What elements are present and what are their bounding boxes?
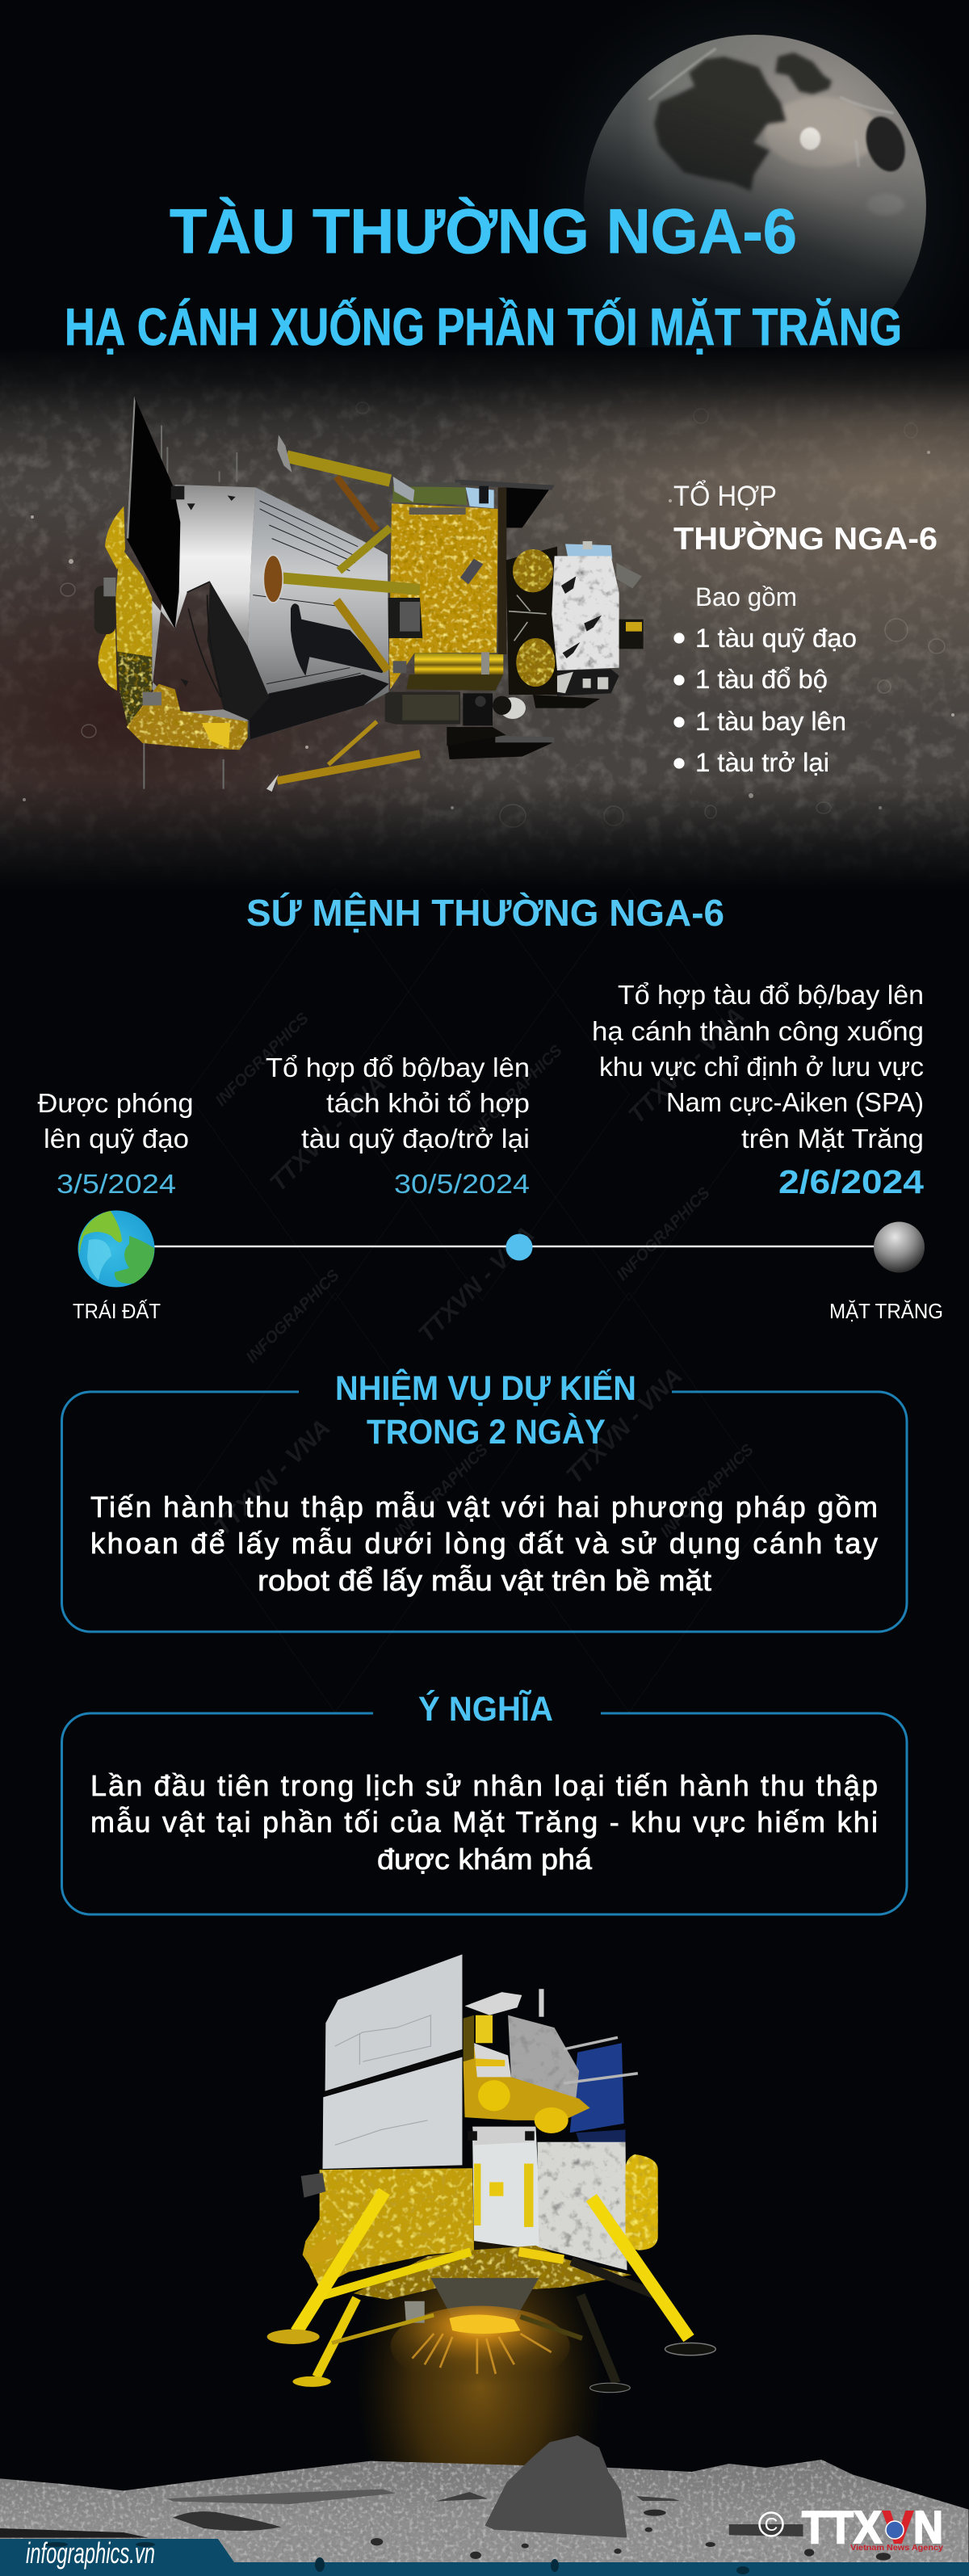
heading: mission: SỨ MỆNH THƯỜNG NGA-6 — [246, 892, 724, 934]
text: planned tasks: khoan để lấy mẫu dưới lòng đất và sử dụng cánh tay — [90, 1527, 878, 1560]
moon — [577, 27, 933, 347]
watermarks — [188, 889, 776, 1712]
heading: significance: Ý NGHĨA — [418, 1690, 553, 1729]
rock — [485, 2435, 627, 2538]
timeline step 2: tách khỏi tổ hợp — [326, 1088, 530, 1118]
timeline step 2: 30/5/2024 — [394, 1169, 530, 1199]
spacecraft orbiter body (left part) — [94, 396, 420, 792]
list of components: 1 tàu đổ bộ — [695, 665, 828, 694]
timeline step 3 — [592, 980, 924, 1200]
timeline step 3: Tổ hợp tàu đổ bộ/bay lên — [618, 980, 924, 1010]
list of components: 1 tàu quỹ đạo — [695, 624, 857, 653]
title — [65, 195, 902, 356]
timeline step 3: trên Mặt Trăng — [741, 1124, 924, 1154]
watermarks: INFOGRAPHICS — [243, 1266, 343, 1367]
watermarks: TTXVN - VNA — [623, 1002, 750, 1129]
milestone dot — [505, 1234, 533, 1260]
timeline step 2: Tổ hợp đổ bộ/bay lên — [266, 1053, 530, 1082]
logo: TTXVN: V — [883, 2502, 913, 2553]
panel: planned tasks — [61, 1368, 907, 1632]
timeline step 3: hạ cánh thành công xuống — [592, 1016, 924, 1046]
timeline line — [154, 1246, 876, 1247]
label: moon: MẶT TRĂNG — [829, 1299, 943, 1323]
text: planned tasks: Tiến hành thu thập mẫu vật với hai phương pháp gồm — [90, 1490, 878, 1523]
timeline step 1: 3/5/2024 — [57, 1169, 176, 1199]
watermarks: TTXVN - VNA — [265, 1070, 392, 1197]
watermarks: INFOGRAPHICS — [614, 1183, 714, 1284]
timeline step 1: Được phóng — [37, 1088, 194, 1118]
label: earth: TRÁI ĐẤT — [73, 1299, 161, 1323]
icon: earth — [78, 1210, 155, 1288]
logo: TTXVN: N — [913, 2502, 943, 2553]
text: significance: mẫu vật tại phần tối của Mặt Trăng - khu vực hiếm khi — [90, 1805, 878, 1838]
watermarks: TTXVN - VNA — [209, 1414, 336, 1541]
watermarks: TTXVN - VNA — [561, 1363, 688, 1490]
text: significance: được khám phá — [377, 1843, 593, 1876]
watermarks: INFOGRAPHICS — [466, 1041, 566, 1142]
text: planned tasks — [90, 1490, 878, 1597]
logo: TTXVN: TTX — [802, 2502, 882, 2553]
watermarks: INFOGRAPHICS — [392, 1440, 492, 1541]
heading: planned tasks: TRONG 2 NGÀY — [367, 1413, 606, 1452]
panel: combination summary — [673, 480, 938, 777]
heading: planned tasks: NHIỆM VỤ DỰ KIẾN — [335, 1368, 636, 1408]
list of components — [673, 624, 857, 777]
label: Bao gồm: Bao gồm — [695, 582, 797, 611]
timeline step 1 — [37, 1088, 194, 1199]
heading: planned tasks — [335, 1368, 636, 1452]
logo: TTXVN — [759, 2502, 943, 2553]
illustration: orbiter/lander stack spacecraft — [94, 396, 644, 792]
text: planned tasks: robot để lấy mẫu vật trên bề mặt — [258, 1564, 711, 1597]
text: significance — [90, 1769, 878, 1876]
panel: significance — [61, 1690, 907, 1914]
footer: blue bar and website tab — [0, 2536, 969, 2576]
timeline step 2: tàu quỹ đạo/trở lại — [301, 1124, 530, 1154]
logo: TTXVN: Vietnam News Agency — [850, 2544, 943, 2553]
lunar ground — [0, 2435, 969, 2576]
panel: lunar surface band — [0, 347, 969, 889]
timeline step 1: lên quỹ đạo — [44, 1124, 189, 1154]
timeline step 3: Nam cực-Aiken (SPA) — [666, 1087, 924, 1117]
list of components: 1 tàu trở lại — [695, 748, 829, 777]
illustration: lander with engine plume — [267, 1954, 715, 2572]
website label: infographics.vn — [26, 2536, 155, 2570]
timeline step 3: khu vực chỉ định ở lưu vực — [599, 1052, 924, 1082]
text: significance: Lần đầu tiên trong lịch sử nhân loại tiến hành thu thập — [90, 1769, 878, 1802]
watermarks: TTXVN - VNA — [413, 1221, 540, 1348]
logo: TTXVN: C — [765, 2514, 778, 2535]
title line 1: TÀU THƯỜNG NGA-6 — [170, 195, 797, 267]
label: TỔ HỢP: TỔ HỢP — [673, 480, 777, 512]
timeline step 3: 2/6/2024 — [778, 1163, 924, 1200]
watermarks: INFOGRAPHICS — [657, 1440, 757, 1541]
label: THƯỜNG NGA-6: THƯỜNG NGA-6 — [673, 521, 938, 557]
spacecraft service module (right part) — [380, 477, 644, 759]
watermarks: INFOGRAPHICS — [212, 1009, 313, 1110]
timeline — [37, 980, 943, 1323]
timeline step 2 — [266, 1053, 530, 1199]
list of components: 1 tàu bay lên — [695, 707, 846, 736]
icon: moon — [874, 1221, 925, 1273]
